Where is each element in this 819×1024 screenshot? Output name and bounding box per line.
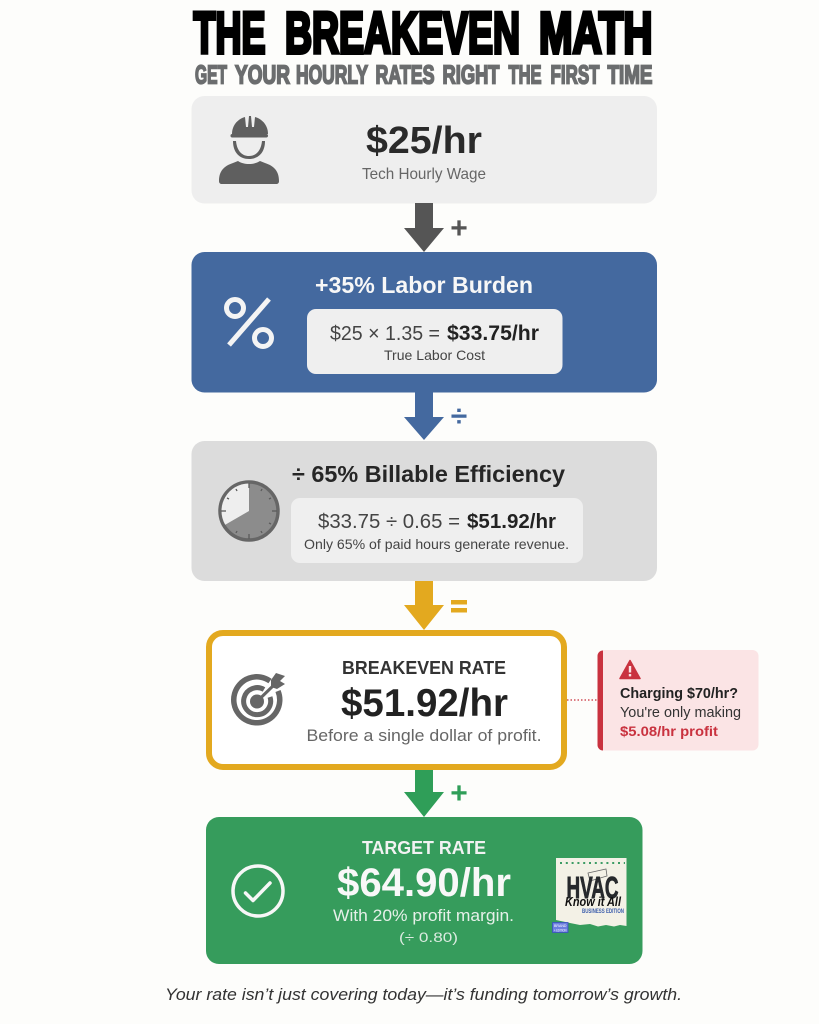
logo: HVAC Know it All [552, 858, 626, 932]
subtitle: TIME [608, 60, 652, 90]
panel: billable efficiency [192, 441, 657, 581]
icon: target with arrow [234, 673, 285, 723]
title: THE [194, 1, 266, 66]
dotted connector to callout [567, 699, 597, 701]
panel: tech hourly wage [192, 96, 657, 204]
formula box: true labor cost: $33.75/hr [447, 322, 539, 345]
wage label: Tech Hourly Wage [362, 166, 486, 183]
callout question: Charging $70/hr? [620, 686, 738, 702]
arrow: wage to labor burden [404, 203, 468, 252]
subtitle: RIGHT [442, 60, 500, 90]
title: MATH [539, 1, 652, 66]
formula box: efficiency: $51.92/hr [467, 510, 556, 533]
subtitle: GET [195, 60, 227, 90]
subtitle: YOUR [235, 60, 290, 90]
panel: breakeven rate [209, 633, 564, 767]
formula box: efficiency: Only 65% of paid hours generate revenue. [304, 536, 569, 552]
target divisor: (÷ 0.80) [399, 929, 458, 945]
subtitle: HOURLY [296, 60, 368, 90]
icon: check mark circle [233, 866, 283, 916]
logo: HVAC Know it All: Know it All [565, 894, 621, 909]
subtitle [195, 60, 652, 90]
formula box: true labor cost [307, 309, 562, 374]
efficiency heading: ÷ 65% Billable Efficiency [292, 461, 565, 487]
icon: clock with 65 percent wedge [220, 482, 278, 540]
icon: percent sign [226, 299, 272, 346]
subtitle: FIRST [550, 60, 600, 90]
formula box: true labor cost: $25 × 1.35 = [330, 323, 440, 345]
target note: With 20% profit margin. [333, 907, 514, 925]
title: BREAKEVEN [285, 1, 520, 66]
callout: charging $70 per hour warning [598, 650, 758, 750]
logo: HVAC Know it All: HVAC [566, 870, 618, 905]
logo: HVAC Know it All: + EDITION [554, 928, 567, 932]
arrow: labor burden to efficiency: ÷ [451, 400, 467, 433]
breakeven heading: BREAKEVEN RATE [342, 658, 506, 678]
arrow: labor burden to efficiency [404, 392, 467, 440]
arrow: breakeven to target [404, 770, 468, 817]
callout statement: You're only making [620, 705, 741, 721]
footer tagline: Your rate isn’t just covering today—it’s funding tomorrow’s growth. [165, 985, 682, 1004]
arrow: breakeven to target: + [450, 777, 468, 810]
breakeven note: Before a single dollar of profit. [306, 726, 542, 745]
target amount: $64.90/hr [337, 861, 511, 905]
formula box: true labor cost: True Labor Cost [384, 347, 485, 363]
subtitle: THE [508, 60, 542, 90]
formula box: efficiency [291, 498, 583, 563]
arrow: efficiency to breakeven [404, 581, 467, 630]
panel: labor burden [192, 252, 657, 392]
callout profit figure: $5.08/hr profit [620, 723, 718, 739]
labor burden heading: +35% Labor Burden [315, 272, 533, 298]
wage amount: $25/hr [366, 120, 482, 162]
logo: HVAC Know it All: BUSINESS EDITION [582, 908, 624, 915]
arrow: wage to labor burden: + [450, 212, 468, 245]
breakeven amount: $51.92/hr [341, 682, 508, 725]
formula box: efficiency: $33.75 ÷ 0.65 = [318, 511, 460, 533]
icon: warning triangle [620, 660, 640, 678]
target heading: TARGET RATE [362, 838, 486, 858]
panel: target rate [206, 817, 642, 964]
logo: HVAC Know it All: BRAND [554, 924, 567, 928]
icon: worker with hard hat [219, 116, 279, 184]
subtitle: RATES [376, 60, 434, 90]
